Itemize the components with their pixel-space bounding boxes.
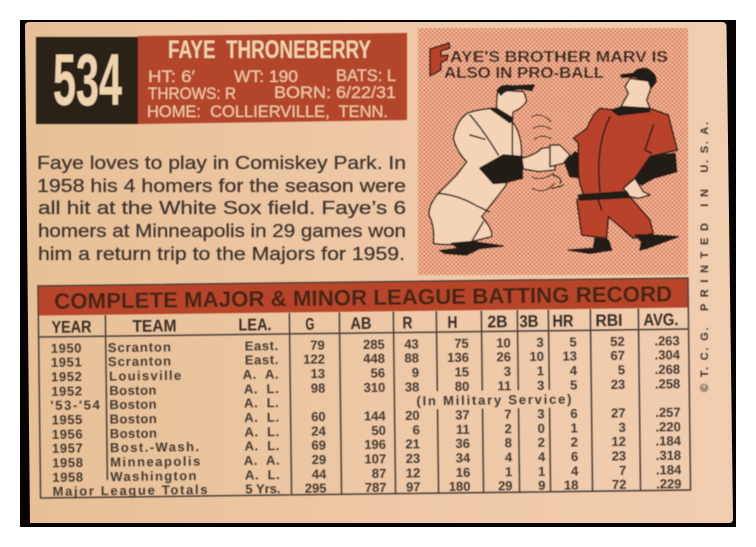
year column: 1950 xyxy=(51,340,82,356)
column headings: 2B xyxy=(487,312,508,332)
biography text: 1958 his 4 homers for the season were xyxy=(37,175,406,196)
R column: 23 xyxy=(406,451,420,466)
R column: 43 xyxy=(404,336,419,352)
HR column: 5 xyxy=(570,377,577,393)
career totals label: Major League Totals xyxy=(52,482,208,499)
RBI column: 72 xyxy=(612,477,627,492)
H column: 11 xyxy=(456,422,470,437)
G column: 44 xyxy=(312,466,327,482)
career span: 5 Yrs. xyxy=(245,481,281,496)
column headings: HR xyxy=(552,311,574,331)
player vitals: BATS: L xyxy=(336,67,396,85)
team column: Washington xyxy=(110,468,197,484)
3B column: 4 xyxy=(538,449,546,464)
HR column: 13 xyxy=(562,348,577,364)
team column: Boston xyxy=(109,397,158,412)
R column: 9 xyxy=(412,365,419,380)
column headings xyxy=(51,310,679,337)
HR column: 6 xyxy=(570,406,578,421)
H column xyxy=(447,336,471,494)
AVG column: .304 xyxy=(654,347,681,362)
R column: 38 xyxy=(405,379,419,395)
R column: 12 xyxy=(406,465,420,481)
G column: 295 xyxy=(305,480,327,496)
3B column: 3 xyxy=(537,378,544,393)
2B column: 4 xyxy=(505,450,513,465)
player vitals: HOME: COLLIERVILLE, TENN. xyxy=(147,103,388,121)
HR column: 5 xyxy=(569,334,577,350)
player vitals: THROWS: R xyxy=(148,85,236,103)
AVG column: .318 xyxy=(656,448,681,463)
HR column: 6 xyxy=(571,449,578,464)
AB column: 310 xyxy=(363,380,385,395)
H column: 136 xyxy=(447,350,469,365)
AVG column: .257 xyxy=(655,405,681,420)
H column: 16 xyxy=(456,465,470,480)
AB column: 787 xyxy=(365,480,387,495)
league column: A. L. xyxy=(245,467,280,482)
AVG column: .184 xyxy=(656,433,682,448)
HR column xyxy=(562,334,579,493)
2B column: 1 xyxy=(505,464,512,479)
team column: Minneapolis xyxy=(110,454,201,470)
H column: 36 xyxy=(455,436,470,451)
year column: 1955 xyxy=(52,412,83,427)
player info panel xyxy=(138,33,407,124)
card number box: 534 xyxy=(53,40,122,121)
RBI column: 7 xyxy=(619,463,626,478)
AB column: 285 xyxy=(363,337,385,352)
2B column: 11 xyxy=(497,378,511,393)
player vitals: BORN: 6/22/31 xyxy=(274,84,396,102)
player vitals xyxy=(147,67,396,121)
military service note: (In Military Service) xyxy=(416,391,572,408)
column headings: AVG. xyxy=(643,310,679,330)
HR column: 4 xyxy=(570,363,578,378)
G column: 79 xyxy=(310,338,325,353)
RBI column: 3 xyxy=(618,420,626,435)
column headings: 3B xyxy=(519,312,539,331)
3B column: 2 xyxy=(538,435,545,450)
year column: 1951 xyxy=(51,354,82,370)
RBI column: 23 xyxy=(611,377,625,392)
league column xyxy=(242,338,280,482)
league column: East. xyxy=(245,338,279,353)
RBI column: 67 xyxy=(610,348,625,363)
2B column: 26 xyxy=(496,349,511,364)
cartoon panel xyxy=(418,28,688,275)
AVG column: .184 xyxy=(656,462,682,477)
column headings: G xyxy=(305,315,315,334)
biography text: Faye loves to play in Comiskey Park. In xyxy=(37,152,406,173)
league column: A. L. xyxy=(244,438,280,453)
biography text xyxy=(37,152,406,264)
table title bar: COMPLETE MAJOR & MINOR LEAGUE BATTING RECORD xyxy=(54,281,672,314)
G column: 29 xyxy=(312,452,326,467)
column headings: TEAM xyxy=(132,316,177,336)
3B column: 1 xyxy=(537,363,544,378)
R column: 88 xyxy=(404,350,419,366)
league column: A. L. xyxy=(244,410,280,425)
RBI column xyxy=(610,334,627,492)
H column: 80 xyxy=(455,379,469,394)
column headings: YEAR xyxy=(51,317,92,337)
team column: Bost.-Wash. xyxy=(110,439,200,455)
team column: Scranton xyxy=(108,353,172,369)
AVG column: .229 xyxy=(656,476,682,491)
H column: 34 xyxy=(456,450,471,465)
biography text: homers at Minneapolis in 29 games won xyxy=(38,220,406,241)
2B column: 7 xyxy=(504,407,512,422)
G column xyxy=(303,337,327,496)
player name: FAYE THRONEBERRY xyxy=(168,36,371,64)
AVG column: .258 xyxy=(655,376,680,391)
league column: A. A. xyxy=(244,453,280,468)
3B column: 3 xyxy=(536,335,544,350)
year column: 1952 xyxy=(51,383,83,399)
HR column: 2 xyxy=(571,434,578,450)
2B column: 10 xyxy=(496,335,511,350)
R column: 21 xyxy=(405,436,420,452)
AVG column: .263 xyxy=(654,333,680,348)
AVG column: .268 xyxy=(655,362,680,377)
3B column: 1 xyxy=(538,464,545,479)
year column: 1958 xyxy=(52,455,84,470)
2B column xyxy=(496,335,513,493)
column headings: RBI xyxy=(595,311,623,330)
RBI column: 27 xyxy=(611,405,626,421)
cartoon: white uniform player xyxy=(429,85,555,255)
player vitals: HT: 6′ xyxy=(148,68,195,86)
2B column: 8 xyxy=(505,435,512,450)
AB column: 448 xyxy=(363,351,385,366)
team column: Boston xyxy=(110,411,158,427)
cartoon caption: AYE'S BROTHER MARV IS xyxy=(450,49,668,66)
team column: Boston xyxy=(109,383,157,398)
G column: 13 xyxy=(311,366,325,381)
R column: 97 xyxy=(406,479,421,495)
G column: 122 xyxy=(303,352,325,367)
AB column xyxy=(363,337,387,495)
column headings: AB xyxy=(350,314,372,333)
2B column: 29 xyxy=(498,478,513,493)
year column: 1957 xyxy=(52,440,83,456)
team column: Scranton xyxy=(108,339,172,355)
AVG column xyxy=(654,333,682,491)
2B column: 2 xyxy=(504,421,512,436)
H column: 180 xyxy=(449,479,471,494)
HR column: 4 xyxy=(571,463,579,479)
league column: A. L. xyxy=(244,395,280,410)
3B column: 10 xyxy=(529,349,544,364)
league column: East. xyxy=(245,352,279,367)
table grid xyxy=(38,278,691,498)
3B column: 9 xyxy=(538,478,546,493)
G column: 69 xyxy=(311,437,326,453)
league column: A. A. xyxy=(243,367,279,382)
HR column: 18 xyxy=(564,477,579,493)
AB column: 196 xyxy=(364,437,386,452)
year column: 1956 xyxy=(52,426,83,442)
AB column: 56 xyxy=(371,365,385,380)
card number box xyxy=(36,37,138,124)
column headings: R xyxy=(402,313,413,333)
copyright side text: © T. C. G. P R I N T E D I N U. S. A. xyxy=(699,122,711,392)
H column: 37 xyxy=(455,407,470,422)
team column: Boston xyxy=(110,426,158,441)
year column xyxy=(50,340,102,485)
biography text: him a return trip to the Majors for 1959. xyxy=(38,243,405,264)
G column: 60 xyxy=(311,409,326,424)
AVG column: .220 xyxy=(655,419,681,434)
AB column: 87 xyxy=(372,466,386,481)
year column: 1958 xyxy=(52,469,84,485)
team column: Louisville xyxy=(109,368,182,384)
team column xyxy=(108,339,201,484)
3B column: 0 xyxy=(537,421,545,436)
R column: 6 xyxy=(412,422,420,437)
RBI column: 52 xyxy=(610,334,625,349)
AB column: 107 xyxy=(364,451,386,467)
3B column xyxy=(529,335,546,493)
3B column: 3 xyxy=(537,406,545,421)
cartoon caption: ALSO IN PRO-BALL xyxy=(444,65,604,82)
H column: 75 xyxy=(454,336,469,351)
AB column: 50 xyxy=(371,423,386,438)
column headings: H xyxy=(447,313,458,332)
R column: 20 xyxy=(405,408,420,423)
H column: 15 xyxy=(455,364,469,379)
HR column: 1 xyxy=(570,420,578,436)
RBI column: 12 xyxy=(611,434,626,449)
AB column: 144 xyxy=(364,408,386,424)
G column: 24 xyxy=(311,423,327,439)
cartoon: red uniform player xyxy=(550,68,678,253)
cartoon caption xyxy=(430,43,668,82)
column headings: LEA. xyxy=(238,315,272,335)
RBI column: 5 xyxy=(618,362,625,377)
league column: A. L. xyxy=(244,381,279,396)
year column: '53-'54 xyxy=(50,397,101,413)
player vitals: WT: 190 xyxy=(234,68,298,86)
year column: 1952 xyxy=(51,369,83,384)
2B column: 3 xyxy=(504,364,511,379)
batting record table xyxy=(38,278,691,499)
R column xyxy=(404,336,421,495)
league column: A. L. xyxy=(244,424,280,439)
biography text: all hit at the White Sox field. Faye’s 6 xyxy=(38,197,406,218)
RBI column: 23 xyxy=(612,448,626,464)
G column: 98 xyxy=(311,380,325,396)
